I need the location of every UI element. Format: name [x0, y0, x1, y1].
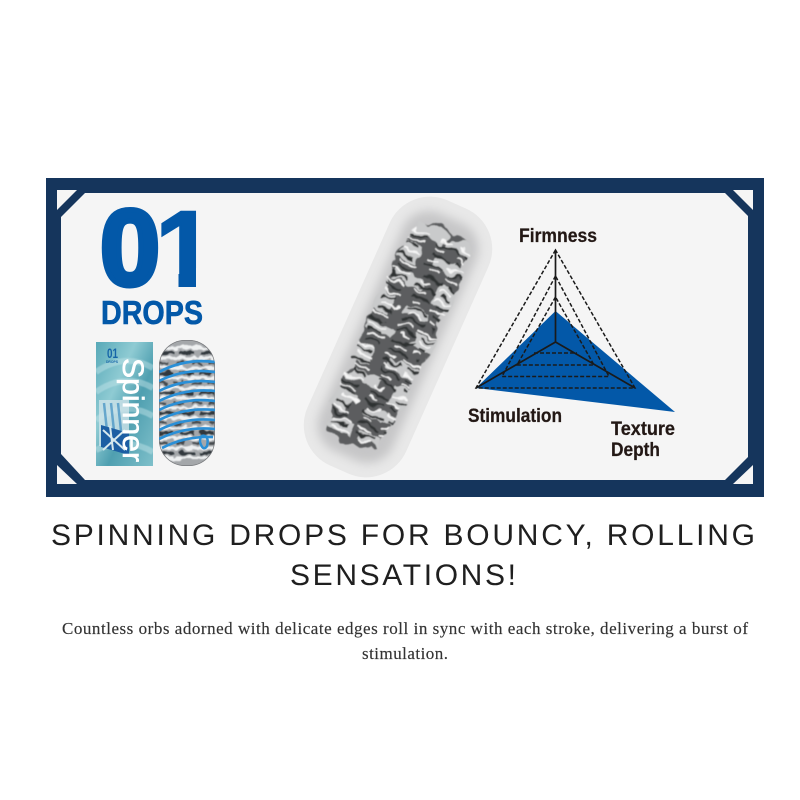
- capsule shell: [290, 183, 506, 491]
- panel: navy frame: [46, 178, 764, 497]
- label: Firmness: Firmness: [519, 226, 597, 247]
- icon: product package: DROPS: [106, 359, 118, 364]
- heading: 01 DROPS: 1: [155, 188, 215, 309]
- chart axes: [476, 250, 635, 388]
- body text: stimulation.: [362, 644, 448, 663]
- chart: radar triangle: [476, 250, 675, 412]
- body text: [62, 619, 748, 663]
- label: Texture Depth: Texture: [611, 419, 675, 440]
- icon: product package: 01: [107, 345, 118, 361]
- heading: 01 DROPS: 0: [100, 187, 160, 308]
- chart data area: [476, 311, 675, 412]
- image: large capsule cross-section: [290, 183, 506, 491]
- title: [51, 519, 755, 592]
- label: Texture Depth: Depth: [611, 440, 660, 461]
- icon: product package: Spinner: [116, 358, 149, 462]
- panel: light inner area: [61, 193, 748, 480]
- heading: 01 DROPS: [100, 187, 218, 331]
- body text: Countless orbs adorned with delicate edges roll in sync with each stroke, delivering a burst of: [62, 619, 748, 638]
- label: Texture Depth: [611, 419, 675, 461]
- label: Stimulation: Stimulation: [468, 406, 562, 427]
- icon: product package: [96, 342, 153, 466]
- chart grid dashed: [476, 250, 635, 388]
- title: SPINNING DROPS FOR BOUNCY, ROLLING: [51, 519, 755, 552]
- title: SENSATIONS!: [290, 559, 516, 592]
- heading: 01 DROPS: DROPS: [101, 294, 203, 331]
- capsule inner texture: [317, 213, 479, 459]
- icon: small spinner capsule: [158, 340, 216, 466]
